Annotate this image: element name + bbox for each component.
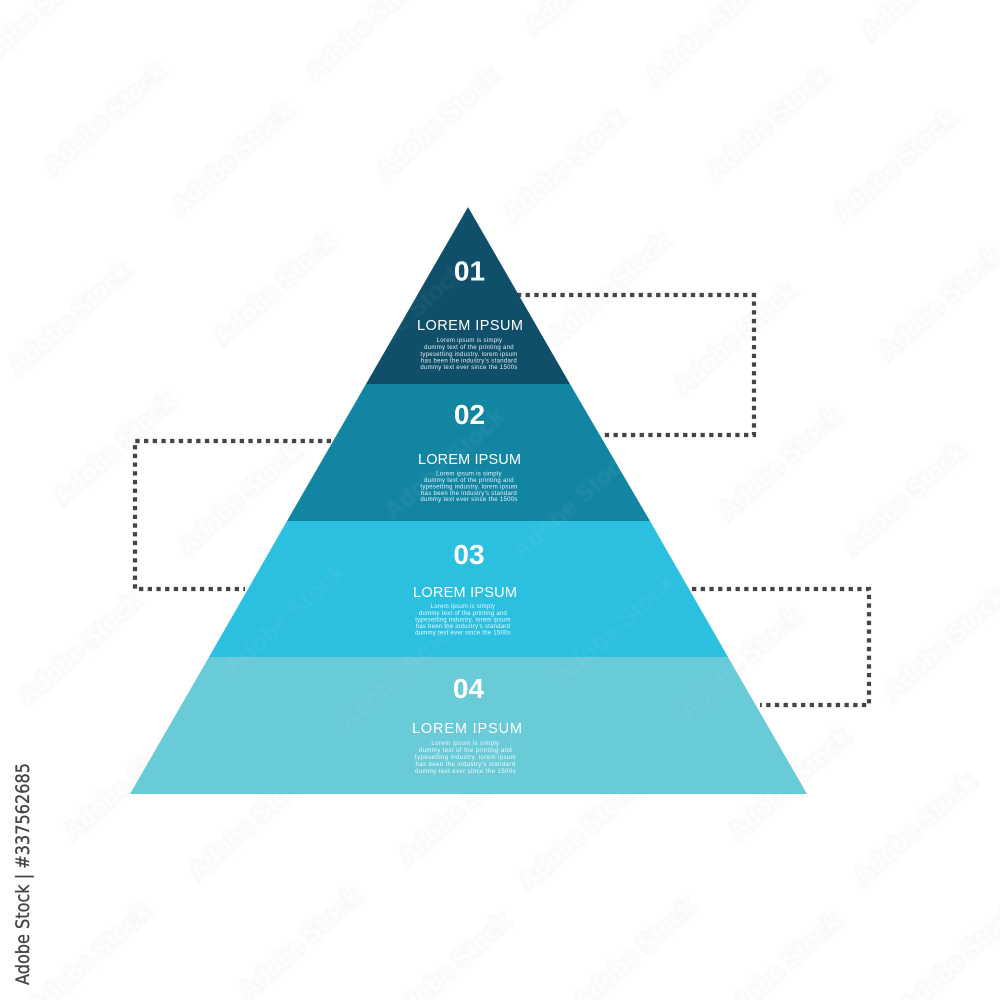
dashed connector: level 3 to level 4 (right) [692, 589, 869, 705]
body text 3: dummy text ever since the 1500s [415, 630, 511, 636]
stock watermark pattern: Adobe Stock [166, 97, 298, 221]
stock watermark pattern: Adobe Stock [4, 257, 136, 381]
stock watermark pattern: Adobe Stock [174, 437, 306, 561]
stock watermark pattern: Adobe Stock [184, 762, 316, 886]
stock watermark pattern: Adobe Stock [49, 387, 181, 511]
dashed connector: level 1 to level 2 (right) [517, 295, 754, 435]
body text 3: typesetting industry. lorem ipsum [415, 618, 511, 624]
pyramid tier 2 [287, 384, 650, 521]
body text 1: typesetting industry. lorem ipsum [420, 352, 518, 358]
number 03: 03 [453, 539, 485, 570]
number 01: 01 [454, 256, 485, 286]
watermark over pyramid: Adobe Stock [674, 602, 806, 726]
stock watermark pattern: Adobe Stock [394, 747, 526, 871]
number 02: 02 [454, 399, 485, 430]
pyramid tier 3 [209, 521, 728, 657]
body text 2: has been the industry's standard [421, 491, 517, 497]
stock watermark pattern: Adobe Stock [714, 402, 846, 526]
body text 1: Lorem ipsum is simply [437, 338, 502, 344]
body text 4: Lorem ipsum is simply [431, 741, 500, 747]
stock watermark pattern: Adobe Stock [724, 722, 856, 846]
body text 2: dummy text of the printing and [424, 478, 514, 484]
body text 2: dummy text ever since the 1500s [420, 497, 518, 503]
watermark over pyramid: Adobe Stock [379, 402, 511, 526]
heading 1: LOREM IPSUM [417, 318, 523, 334]
number 04: 04 [453, 673, 484, 704]
body text 1: dummy text ever since the 1500s [420, 365, 518, 371]
stock watermark pattern: Adobe Stock [372, 62, 504, 186]
stock watermark pattern: Adobe Stock [14, 587, 146, 711]
watermark over pyramid: Adobe Stock [219, 557, 351, 681]
stock watermark pattern: Adobe Stock [674, 602, 806, 726]
body text 2: Lorem ipsum is simply [436, 472, 502, 478]
heading 4: LOREM IPSUM [412, 721, 522, 737]
stock watermark pattern: Adobe Stock [839, 437, 971, 561]
body text 4: dummy text of the printing and [419, 748, 512, 754]
body text 2: typesetting industry. lorem ipsum [420, 484, 518, 490]
stock watermark pattern: Adobe Stock [669, 277, 801, 401]
pyramid tier 1 [366, 207, 570, 384]
body text 3: has been the industry's standard [416, 624, 510, 630]
body text 4: dummy text ever since the 1500s [415, 769, 516, 775]
pyramid tier 4 [130, 657, 807, 794]
stock id label: Adobe Stock | #337562685 [12, 763, 34, 985]
stock watermark pattern: Adobe Stock [514, 772, 646, 896]
watermark over pyramid: Adobe Stock [394, 722, 526, 846]
watermark over pyramid: Adobe Stock [339, 257, 471, 381]
watermark over pyramid [242, 268, 674, 657]
stock watermark pattern: Adobe Stock [39, 57, 171, 181]
body text 4: typesetting industry. lorem ipsum [415, 755, 516, 761]
stock watermark pattern: Adobe Stock [849, 767, 981, 891]
watermark over pyramid: Adobe Stock [334, 612, 466, 736]
body text 1: dummy text of the printing and [424, 345, 514, 351]
dashed connector: level 2 to level 3 (left) [135, 441, 331, 589]
body text 3: Lorem ipsum is simply [431, 604, 495, 610]
body text 3: dummy text of the printing and [419, 611, 507, 617]
watermark over pyramid: Adobe Stock [174, 437, 306, 561]
heading 2: LOREM IPSUM [418, 452, 521, 468]
body text 4: has been the industry's standard [416, 762, 515, 768]
body text 1: has been the industry's standard [421, 358, 517, 364]
stock watermark pattern: Adobe Stock [543, 227, 675, 351]
watermark over pyramid: Adobe Stock [549, 567, 681, 691]
stock watermark pattern: Adobe Stock [499, 104, 631, 228]
stock watermark pattern: Adobe Stock [209, 227, 341, 351]
stock watermark pattern: Adobe Stock [829, 104, 961, 228]
stock watermark pattern: Adobe Stock [702, 62, 834, 186]
heading 3: LOREM IPSUM [413, 585, 517, 601]
watermark over pyramid: Adobe Stock [507, 442, 639, 566]
stock watermark pattern: Adobe Stock [59, 722, 191, 846]
